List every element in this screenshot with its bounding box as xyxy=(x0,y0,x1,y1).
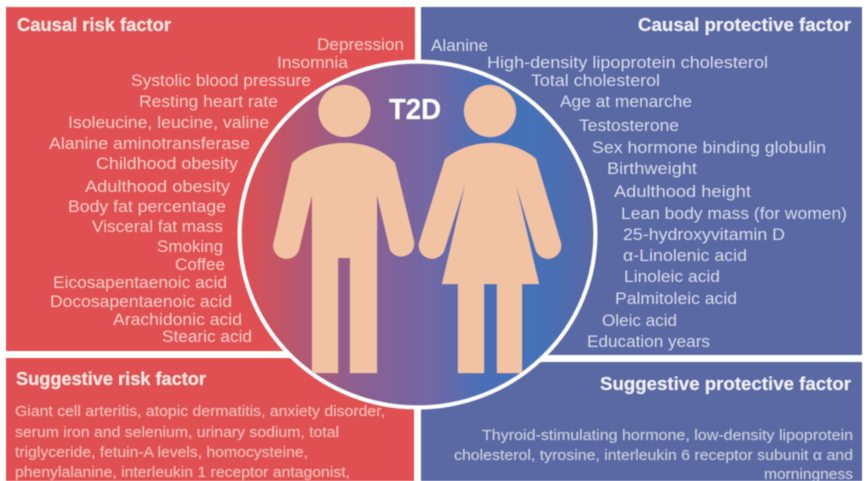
list: causal risk factors: Eicosapentaenoic acid xyxy=(53,273,227,292)
text block: suggestive protective factors xyxy=(454,428,853,481)
list: causal risk factors: Stearic acid xyxy=(162,327,252,346)
list: causal risk factors: Systolic blood pressure xyxy=(131,71,311,90)
list: causal risk factors: Isoleucine, leucine, valine xyxy=(68,113,269,132)
text block: suggestive risk factors: serum iron and selenium, urinary sodium, total xyxy=(15,425,339,441)
text block: suggestive risk factors: phenylalanine, interleukin 1 receptor antagonist, xyxy=(15,465,350,481)
panel: suggestive protective factor xyxy=(421,362,862,481)
list: causal protective factors xyxy=(431,36,847,351)
list: causal risk factors: Smoking xyxy=(157,237,223,256)
list: causal risk factors: Insomnia xyxy=(277,53,349,72)
heading: suggestive risk factor: Suggestive risk factor xyxy=(16,368,206,389)
text block: suggestive risk factors: Giant cell arteritis, atopic dermatitis, anxiety disorder, xyxy=(15,404,385,420)
icon: man xyxy=(273,85,414,373)
list: causal protective factors: Oleic acid xyxy=(602,311,677,330)
list: causal protective factors: Alanine xyxy=(431,36,488,55)
list: causal protective factors: Birthweight xyxy=(607,159,697,178)
list: causal protective factors: Sex hormone binding globulin xyxy=(592,138,826,157)
list: causal protective factors: Linoleic acid xyxy=(624,267,720,286)
list: causal risk factors: Adulthood obesity xyxy=(85,177,231,196)
icon: woman xyxy=(419,85,561,373)
list: causal protective factors: Age at menarche xyxy=(560,92,692,111)
list: causal protective factors: High-density lipoprotein cholesterol xyxy=(487,53,768,72)
heading: causal risk factor: Causal risk factor xyxy=(17,14,171,35)
list: causal protective factors: Total cholesterol xyxy=(531,71,660,90)
list: causal risk factors: Visceral fat mass xyxy=(92,217,223,236)
heading: suggestive protective factor: Suggestive protective factor xyxy=(600,373,851,394)
central circle xyxy=(240,62,596,408)
list: causal protective factors: 25-hydroxyvitamin D xyxy=(623,225,785,244)
label: T2D: T2D xyxy=(389,94,441,126)
text block: suggestive protective factors: Thyroid-stimulating hormone, low-density lipoprotein xyxy=(482,428,853,444)
list: causal risk factors xyxy=(49,35,404,346)
list: causal risk factors: Body fat percentage xyxy=(68,197,226,216)
text block: suggestive protective factors: cholesterol, tyrosine, interleukin 6 receptor subunit α and xyxy=(454,448,853,464)
list: causal protective factors: Education years xyxy=(587,332,710,351)
list: causal risk factors: Childhood obesity xyxy=(96,154,239,173)
list: causal risk factors: Resting heart rate xyxy=(139,92,278,111)
list: causal protective factors: Adulthood height xyxy=(614,182,751,201)
list: causal protective factors: α-Linolenic acid xyxy=(623,246,747,265)
list: causal protective factors: Testosterone xyxy=(579,116,679,135)
list: causal risk factors: Alanine aminotransferase xyxy=(49,134,250,153)
list: causal protective factors: Lean body mass (for women) xyxy=(621,204,847,223)
panel: suggestive risk factor xyxy=(6,358,414,481)
list: causal risk factors: Arachidonic acid xyxy=(113,310,242,329)
text block: suggestive risk factors xyxy=(15,404,385,481)
list: causal protective factors: Palmitoleic acid xyxy=(615,289,737,308)
heading: causal protective factor: Causal protective factor xyxy=(638,14,851,35)
list: causal risk factors: Coffee xyxy=(175,255,225,274)
list: causal risk factors: Depression xyxy=(317,35,404,54)
text block: suggestive risk factors: triglyceride, fetuin-A levels, homocysteine, xyxy=(15,445,308,461)
list: causal risk factors: Docosapentaenoic acid xyxy=(50,292,232,311)
